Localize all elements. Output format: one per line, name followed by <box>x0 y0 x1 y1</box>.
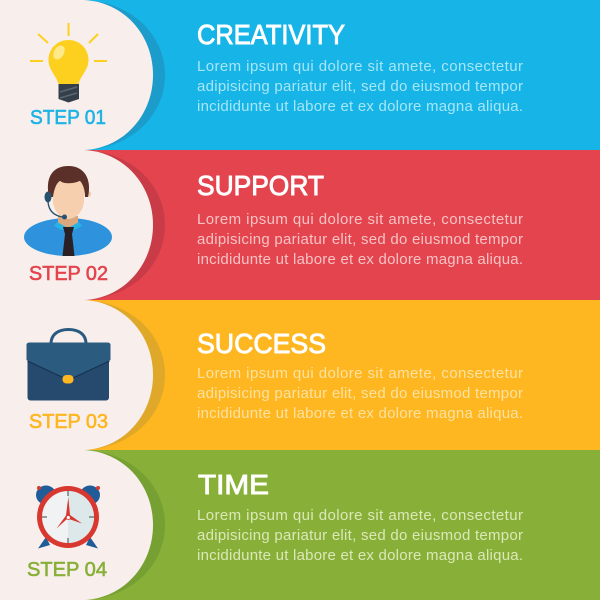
heading: creativity: CREATIVITY <box>197 19 345 50</box>
text block: time: adipisicing pariatur elit, sed do eiusmod tempor <box>197 527 523 544</box>
text block: support: adipisicing pariatur elit, sed do eiusmod tempor <box>197 231 523 248</box>
panel: support <box>0 150 600 300</box>
text block: support: incididunte ut labore et ex dolore magna aliqua. <box>197 251 523 268</box>
label: step 01: STEP 01 <box>30 107 106 129</box>
text block: creativity <box>197 58 523 115</box>
text block: time: Lorem ipsum qui dolore sit amete, consectetur <box>197 507 523 524</box>
label: step 03: STEP 03 <box>29 411 108 433</box>
text block: creativity: Lorem ipsum qui dolore sit amete, consectetur <box>197 58 523 75</box>
panel: creativity <box>0 0 600 150</box>
text block: success: adipisicing pariatur elit, sed do eiusmod tempor <box>197 385 523 402</box>
text block: creativity: incididunte ut labore et ex dolore magna aliqua. <box>197 98 523 115</box>
text block: support: Lorem ipsum qui dolore sit amete, consectetur <box>197 211 523 228</box>
text block: time <box>197 507 523 564</box>
text block: success <box>197 365 523 422</box>
text block: support <box>197 211 523 268</box>
icon: light bulb <box>30 23 107 102</box>
icon: support agent <box>24 166 112 256</box>
text block: success: incididunte ut labore et ex dolore magna aliqua. <box>197 405 523 422</box>
heading: success: SUCCESS <box>197 328 326 359</box>
text block: success: Lorem ipsum qui dolore sit amete, consectetur <box>197 365 523 382</box>
text block: creativity: adipisicing pariatur elit, sed do eiusmod tempor <box>197 78 523 95</box>
label: step 02: STEP 02 <box>29 263 108 285</box>
heading: support: SUPPORT <box>197 170 324 201</box>
panel: time <box>0 450 600 600</box>
label: step 04: STEP 04 <box>27 559 107 581</box>
icon: briefcase <box>26 330 110 400</box>
panel: success <box>0 300 600 450</box>
text block: time: incididunte ut labore et ex dolore magna aliqua. <box>197 547 523 564</box>
heading: time: TIME <box>198 469 269 500</box>
icon: alarm clock <box>36 486 100 548</box>
